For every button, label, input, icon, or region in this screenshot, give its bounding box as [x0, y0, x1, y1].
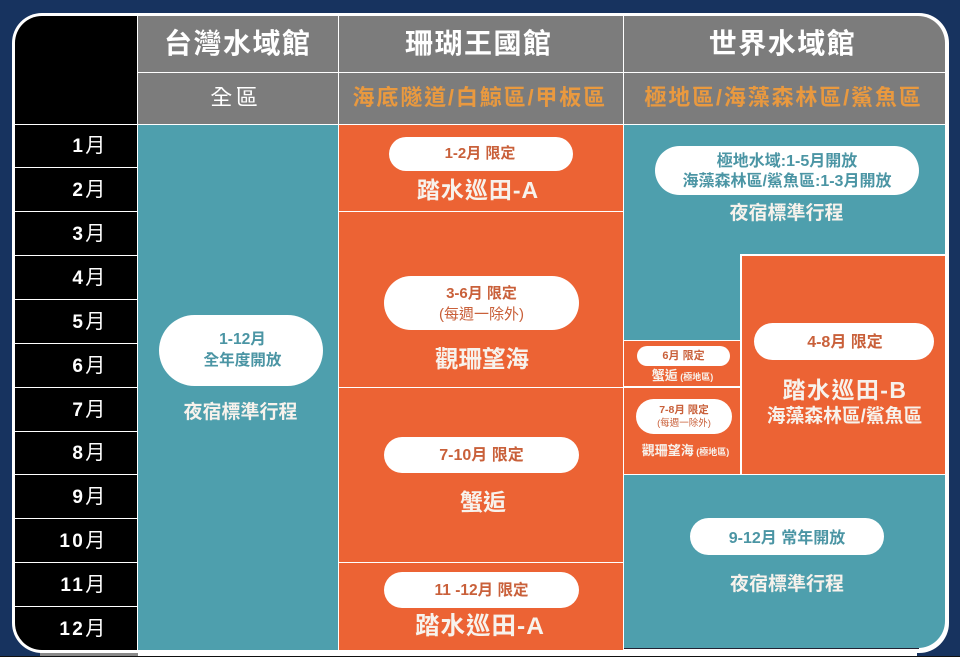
- panel: world polar and kelp open period: [624, 125, 945, 340]
- label: overnight standard: 夜宿標準行程: [730, 574, 844, 594]
- label: water walk A: 踏水巡田-A: [415, 612, 545, 640]
- pill: June limited: [637, 346, 730, 366]
- panel: world June: [624, 341, 740, 386]
- bottom white strip: [40, 650, 917, 656]
- panel: coral Nov-Dec: [339, 563, 622, 650]
- panel: coral Jul-Oct: [339, 388, 622, 562]
- label: water walk B: 踏水巡田-B: [783, 377, 907, 403]
- subheading: coral zones: 海底隧道/白鯨區/甲板區: [353, 85, 607, 110]
- panel: coral Mar-Jun: [339, 212, 622, 386]
- panel: coral Jan-Feb: [339, 125, 622, 210]
- heading: Taiwan waters hall: [138, 16, 338, 72]
- label: water walk A: 踏水巡田-A: [417, 177, 539, 203]
- month: March: 3月: [72, 223, 108, 245]
- month: May: [15, 300, 137, 342]
- pill: Mar-Jun limited: [384, 276, 579, 330]
- month: June: 6月: [72, 355, 108, 377]
- month: February: 2月: [72, 179, 108, 201]
- pill: Apr-Aug limited: 4-8月 限定: [807, 334, 883, 351]
- pill: Nov-Dec limited: [384, 572, 579, 608]
- panel: world Apr-Aug: [740, 254, 945, 474]
- label: kelp and shark zones: 海藻森林區/鯊魚區: [767, 404, 922, 426]
- month: December: [15, 607, 137, 650]
- pill: Apr-Aug limited: [754, 323, 934, 360]
- pill: Sep-Dec open: 9-12月 常年開放: [729, 530, 845, 547]
- heading: Taiwan waters hall: 台灣水域館: [164, 28, 312, 59]
- month: October: 10月: [59, 530, 108, 552]
- pill: full year open: 1-12月: [219, 331, 266, 348]
- pill: Mar-Jun limited: 3-6月 限定: [446, 285, 517, 302]
- label: coral sea view: 觀珊望海: [435, 346, 529, 372]
- label: coral sea view polar: 觀珊望海 (極地區): [642, 442, 729, 458]
- month: March: [15, 212, 137, 254]
- bottom edge line: [0, 656, 960, 657]
- subheading: world zones: [624, 73, 945, 124]
- heading: world waters hall: 世界水域館: [709, 28, 856, 59]
- pill: full year open: [159, 315, 323, 386]
- month: January: [15, 125, 137, 166]
- heading: world waters hall: [624, 16, 945, 72]
- pill: June limited: 6月 限定: [662, 350, 705, 362]
- pill: Jul-Aug limited: (每週一除外): [657, 418, 711, 428]
- month: July: 7月: [72, 399, 108, 421]
- month: September: 9月: [72, 486, 108, 508]
- month: April: 4月: [72, 267, 108, 289]
- month: November: 11月: [60, 574, 108, 596]
- month: February: [15, 168, 137, 210]
- pill: open months: 海藻森林區/鯊魚區:1-3月開放: [683, 172, 891, 190]
- month: November: [15, 563, 137, 606]
- pill: Nov-Dec limited: 11 -12月 限定: [435, 582, 528, 599]
- month: June: [15, 344, 137, 386]
- pill: open months: [655, 146, 919, 195]
- subheading: all zones: [138, 73, 338, 124]
- pill: Jan-Feb limited: [389, 137, 573, 171]
- label: overnight standard: 夜宿標準行程: [183, 402, 298, 422]
- label: overnight standard: 夜宿標準行程: [729, 202, 844, 224]
- month: August: [15, 432, 137, 474]
- month: October: [15, 519, 137, 562]
- month: July: [15, 388, 137, 430]
- bottom dark line under world panel: [624, 648, 919, 649]
- heading: coral kingdom hall: 珊瑚王國館: [405, 28, 552, 59]
- label: crab encounter: 蟹逅: [460, 489, 506, 515]
- pill: open months: 極地水域:1-5月開放: [717, 152, 857, 170]
- corner block: [15, 16, 137, 124]
- month: August: 8月: [72, 442, 108, 464]
- pill: Jan-Feb limited: 1-2月 限定: [445, 145, 515, 162]
- pill: full year open: 全年度開放: [204, 352, 281, 369]
- month: May: 5月: [72, 311, 108, 333]
- pill: Sep-Dec open: [690, 518, 884, 555]
- pill: Jul-Oct limited: 7-10月 限定: [439, 447, 524, 464]
- pill: Mar-Jun limited: (每週一除外): [439, 306, 524, 323]
- month: April: [15, 256, 137, 298]
- panel: world Sep-Dec: [624, 475, 945, 648]
- pill: Jul-Aug limited: [636, 399, 732, 434]
- panel: Taiwan hall full year: [138, 125, 338, 650]
- month: December: 12月: [59, 618, 108, 640]
- pill: Jul-Aug limited: 7-8月 限定: [659, 404, 709, 416]
- bottom gray strip: [40, 653, 138, 656]
- subheading: world zones: 極地區/海藻森林區/鯊魚區: [644, 85, 923, 110]
- label: crab encounter polar: 蟹逅 (極地區): [652, 368, 713, 382]
- subheading: coral zones: [339, 73, 622, 124]
- subheading: all zones: 全區: [210, 85, 261, 110]
- pill: Jul-Oct limited: [384, 437, 579, 473]
- heading: coral kingdom hall: [339, 16, 622, 72]
- panel: world Jul-Aug: [624, 388, 740, 474]
- month: September: [15, 475, 137, 518]
- month: January: 1月: [72, 135, 108, 157]
